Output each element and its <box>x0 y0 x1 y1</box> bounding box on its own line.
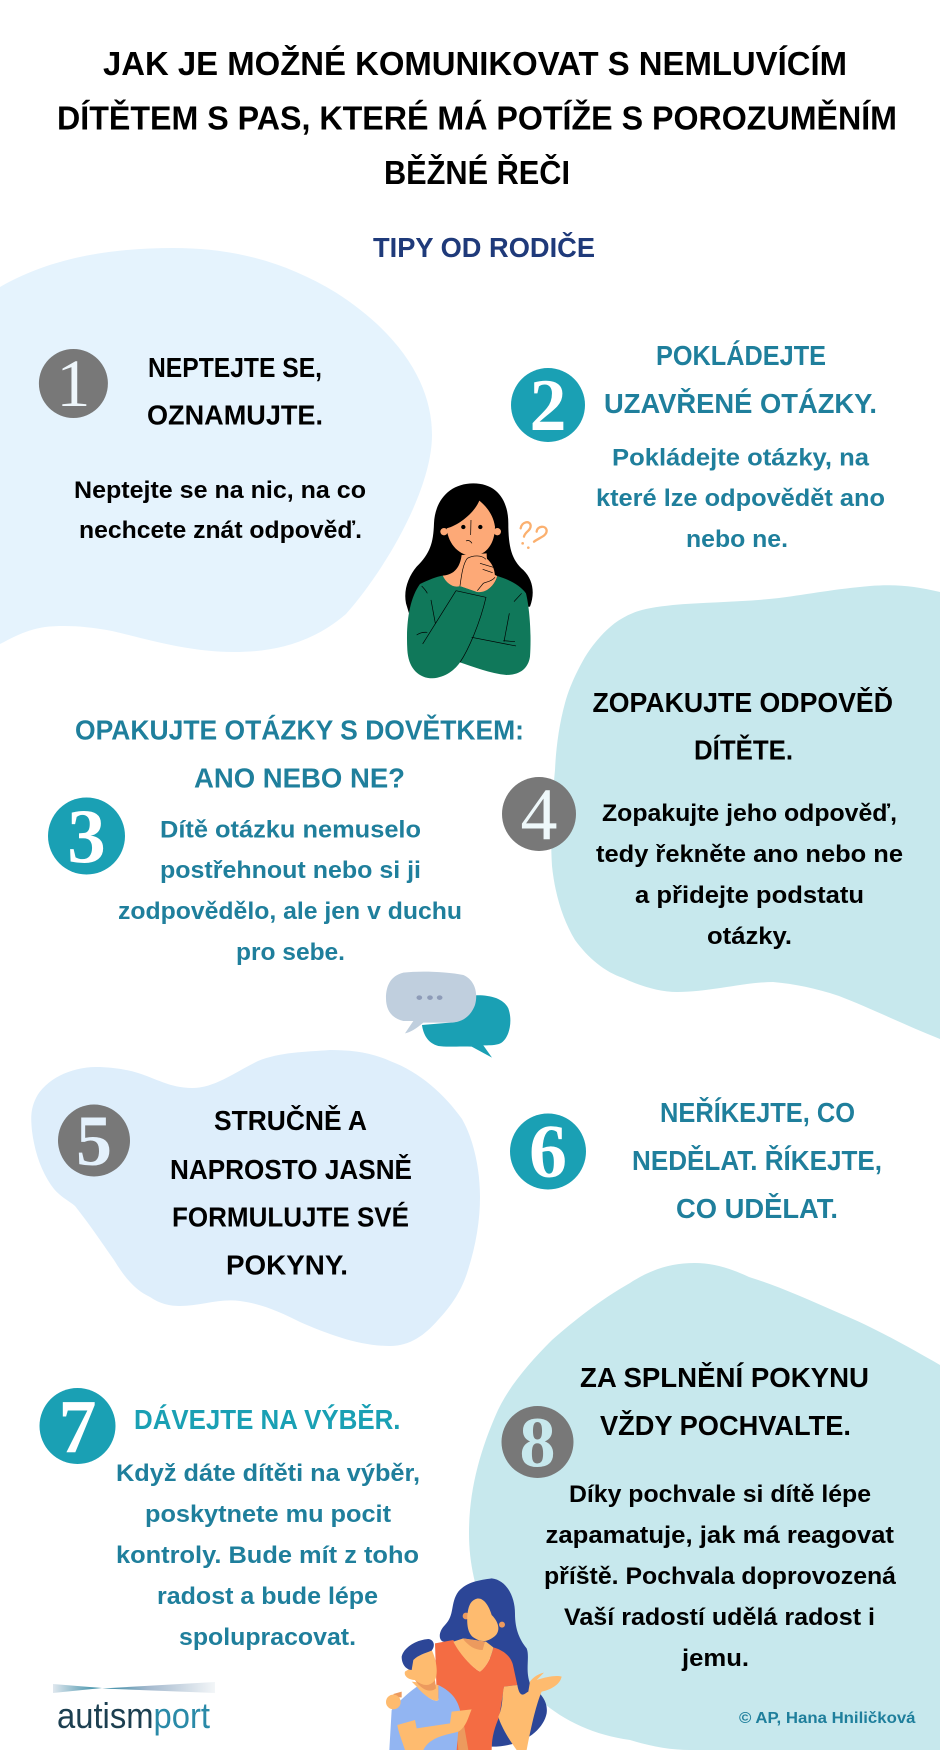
text: tip 2 body: Pokládejte otázky, na <box>612 444 870 472</box>
heading: tip 2 <box>604 340 877 419</box>
heading: tip 3: ANO NEBO NE? <box>194 762 405 793</box>
panel: tip 5 <box>31 1050 480 1346</box>
text: tip 4 body: Zopakujte jeho odpověď, <box>602 800 897 827</box>
panel: tip 8 <box>469 1263 940 1750</box>
icon: number 8: 8 <box>520 1402 556 1482</box>
icon: speech bubbles <box>386 972 510 1058</box>
text: tip 8 body <box>544 1481 897 1672</box>
heading: tip 4: DÍTĚTE. <box>694 734 793 766</box>
heading: tip 3 <box>75 714 524 793</box>
text: tip 6 heading <box>632 1097 882 1224</box>
panel: tip 1 <box>0 248 432 652</box>
icon: number 3: 3 <box>67 793 106 879</box>
text: tip 6 heading: NEŘÍKEJTE, CO <box>660 1097 855 1128</box>
icon: number 7 <box>40 1385 116 1469</box>
blob: tip 4 background <box>551 585 940 1039</box>
text: tip 5 heading: POKYNY. <box>226 1250 348 1280</box>
icon: number 4 <box>502 774 576 856</box>
heading: tip 3: OPAKUJTE OTÁZKY S DOVĚTKEM: <box>75 714 524 745</box>
logo: autismport: autismport <box>57 1695 210 1736</box>
text: tip 3 body: Dítě otázku nemuselo <box>160 816 421 843</box>
title: DÍTĚTEM S PAS, KTERÉ MÁ POTÍŽE S POROZUMĚNÍM <box>57 100 897 138</box>
heading: tip 8: ZA SPLNĚNÍ POKYNU <box>580 1362 869 1393</box>
text: tip 7 body: radost a bude lépe <box>157 1583 378 1610</box>
text: tip 8 body: zapamatuje, jak má reagovat <box>546 1522 894 1549</box>
text: tip 6 heading: CO UDĚLAT. <box>676 1193 838 1224</box>
panel: tip 7 <box>40 1385 420 1651</box>
icon: number 5 <box>58 1101 130 1181</box>
icon: number 1 <box>39 345 108 421</box>
text: tip 7 body: spolupracovat. <box>179 1624 356 1651</box>
text: tip 1 body: Neptejte se na nic, na co <box>74 477 366 504</box>
text: tip 7 body: poskytnete mu pocit <box>145 1501 391 1528</box>
text: tip 5 heading <box>170 1104 412 1280</box>
text: tip 5 heading: NAPROSTO JASNĚ <box>170 1154 412 1185</box>
text: tip 4 body <box>596 800 903 950</box>
text: tip 6 heading: NEDĚLAT. ŘÍKEJTE, <box>632 1145 882 1176</box>
heading: tip 4 <box>592 687 893 766</box>
text: tip 5 heading: FORMULUJTE SVÉ <box>172 1202 409 1232</box>
text: tip 3 body: pro sebe. <box>236 939 345 966</box>
text: tip 4 body: otázky. <box>707 923 792 950</box>
text: tip 7 body: Když dáte dítěti na výběr, <box>116 1460 420 1487</box>
heading: tip 1: NEPTEJTE SE, <box>148 352 322 383</box>
heading: tip 8 <box>580 1362 869 1441</box>
icon: number 4: 4 <box>520 774 558 856</box>
text: tip 8 body: Vaší radostí udělá radost i <box>564 1604 875 1631</box>
blob: tip 8 background <box>469 1263 940 1750</box>
text: tip 2 body: nebo ne. <box>686 526 788 553</box>
icon: number 5: 5 <box>76 1101 112 1181</box>
text: tip 8 body: příště. Pochvala doprovozená <box>544 1563 897 1590</box>
blob: tip 5 background <box>31 1050 480 1346</box>
heading: tip 8: VŽDY POCHVALTE. <box>600 1410 851 1441</box>
heading: tip 1 <box>147 352 323 430</box>
text: tip 7 body <box>116 1460 420 1651</box>
icon: number 6 <box>510 1110 586 1194</box>
heading: tip 7: DÁVEJTE NA VÝBĚR. <box>134 1404 400 1435</box>
panel: tip 6 <box>510 1097 882 1224</box>
icon: number 8 <box>502 1402 574 1482</box>
text: tip 2 body <box>596 444 885 553</box>
text: tip 7 body: kontroly. Bude mít z toho <box>116 1542 419 1569</box>
icon: mother and son <box>386 1578 562 1750</box>
icon: number 3 <box>48 793 125 879</box>
title: JAK JE MOŽNÉ KOMUNIKOVAT S NEMLUVÍCÍM <box>103 45 847 83</box>
text: tip 8 body: Díky pochvale si dítě lépe <box>569 1481 871 1508</box>
icon: number 7: 7 <box>58 1385 96 1469</box>
icon: number 1: 1 <box>56 345 90 421</box>
text: tip 4 body: a přidejte podstatu <box>635 882 864 909</box>
text: tip 4 body: tedy řekněte ano nebo ne <box>596 841 903 868</box>
text: tip 1 body: nechcete znát odpověď. <box>79 517 362 544</box>
icon: thinking woman <box>405 483 547 678</box>
icon: number 6: 6 <box>529 1110 567 1194</box>
heading: tip 1: OZNAMUJTE. <box>147 399 323 430</box>
title: BĚŽNÉ ŘEČI <box>384 153 570 192</box>
text: tip 5 heading: STRUČNĚ A <box>214 1104 367 1136</box>
heading: tip 2: POKLÁDEJTE <box>656 340 826 371</box>
panel: tip 3 <box>48 714 524 966</box>
text: tip 3 body: zodpovědělo, ale jen v duchu <box>118 898 462 925</box>
text: tip 1 body <box>74 477 366 544</box>
text: tip 8 body: jemu. <box>681 1645 749 1672</box>
icon: number 2: 2 <box>530 365 566 447</box>
heading: tip 4: ZOPAKUJTE ODPOVĚĎ <box>592 687 893 718</box>
credit: © AP, Hana Hniličková <box>739 1710 916 1727</box>
heading: tip 2: UZAVŘENÉ OTÁZKY. <box>604 388 877 419</box>
title <box>57 45 897 192</box>
panel: tip 2 <box>511 340 885 553</box>
icon: number 2 <box>511 365 585 447</box>
subtitle: TIPY OD RODIČE <box>373 231 595 263</box>
text: tip 3 body <box>118 816 462 966</box>
text: tip 2 body: které lze odpovědět ano <box>596 485 885 512</box>
blob: tip 1 background <box>0 248 432 652</box>
text: tip 3 body: postřehnout nebo si ji <box>160 857 421 884</box>
panel: tip 4 <box>502 585 940 1039</box>
